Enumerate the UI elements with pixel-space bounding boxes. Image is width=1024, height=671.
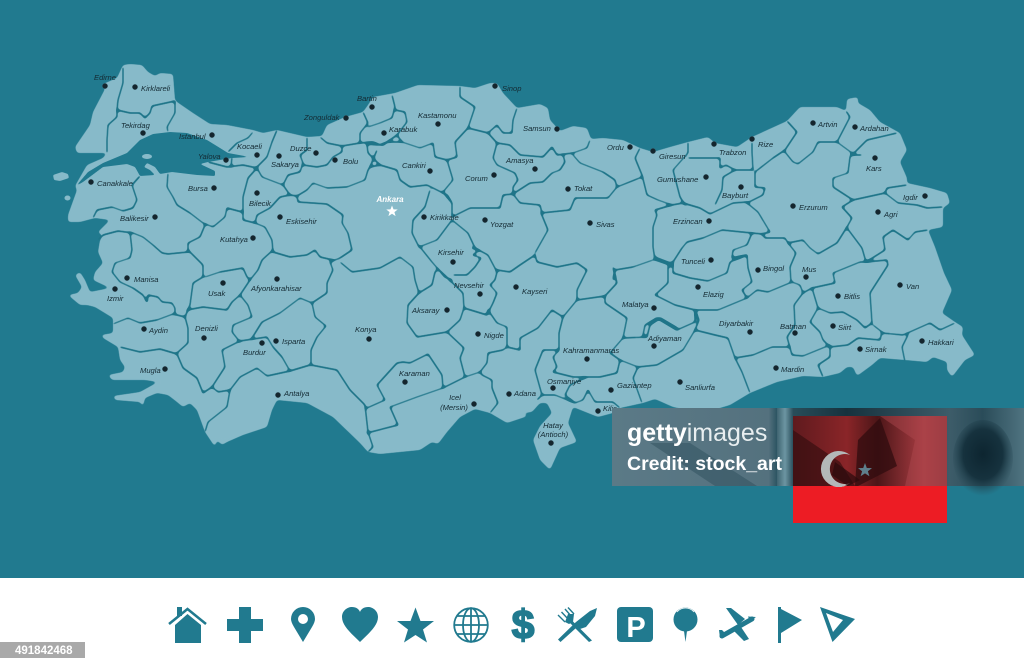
city: Yozgat xyxy=(482,217,514,229)
city: Amasya: Amasya xyxy=(505,156,533,165)
icon: map pin xyxy=(291,607,315,642)
city: Edirne: Edirne xyxy=(94,73,116,82)
city: Tunceli: Tunceli xyxy=(681,257,705,266)
city: Yalova xyxy=(198,152,229,163)
city: Gaziantep: Gaziantep xyxy=(617,381,652,390)
city: Kilis: Kilis xyxy=(603,404,617,413)
star, dimmed xyxy=(858,463,872,476)
city: Usak xyxy=(208,280,227,298)
city: Elazig xyxy=(695,284,724,299)
watermark band: getty images xyxy=(612,408,1024,496)
city: Canakkale: Canakkale xyxy=(97,179,133,188)
city: Kastamonu: Kastamonu xyxy=(418,111,457,120)
city: Balikesir: Balikesir xyxy=(120,214,149,223)
city: Corum xyxy=(465,172,497,183)
city: Konya xyxy=(355,325,377,342)
city: Gaziantep xyxy=(608,381,652,393)
city: Van: Van xyxy=(906,282,919,291)
city: Bartin xyxy=(357,94,377,110)
icon: fork and knife xyxy=(558,608,597,642)
icon: heart xyxy=(342,607,378,642)
city: Erzurum: Erzurum xyxy=(799,203,828,212)
city: Duzce: Duzce xyxy=(290,144,312,153)
city: Sakarya: Sakarya xyxy=(271,160,299,169)
city: Bayburt: Bayburt xyxy=(722,191,749,200)
city: Ardahan: Ardahan xyxy=(859,124,889,133)
city: Kocaeli: Kocaeli xyxy=(237,142,262,151)
city: Trabzon xyxy=(711,141,746,157)
city: Hakkari: Hakkari xyxy=(928,338,954,347)
city: Bingol: Bingol xyxy=(763,264,784,273)
wordmark: gettyimages xyxy=(627,419,767,447)
city: Sivas xyxy=(587,220,615,229)
city: Bilecik xyxy=(249,190,272,208)
city: Icel (Mersin) xyxy=(440,393,477,412)
city: Tekirdag xyxy=(121,121,151,136)
city: Trabzon: Trabzon xyxy=(719,148,746,157)
city: Tekirdag: Tekirdag xyxy=(121,121,151,130)
city: Kilis xyxy=(595,404,617,414)
icon: globe xyxy=(454,608,488,642)
city: Cankiri xyxy=(402,161,433,174)
city: Burdur: Burdur xyxy=(243,348,266,357)
icon: house xyxy=(169,607,206,643)
city: Tokat: Tokat xyxy=(574,184,593,193)
city: Kars xyxy=(866,155,882,173)
footer bar xyxy=(0,578,1024,671)
image id badge: 491842468 xyxy=(15,645,73,657)
city: Bursa: Bursa xyxy=(188,184,208,193)
icon: parking xyxy=(617,607,653,644)
city: Tokat xyxy=(565,184,593,193)
crescent, dimmed xyxy=(821,451,850,487)
city: Bartin: Bartin xyxy=(357,94,377,103)
city: Eskisehir: Eskisehir xyxy=(286,217,317,226)
city: Icel (Mersin): Icel xyxy=(449,393,461,402)
city: Edirne xyxy=(94,73,116,89)
city: Bolu: Bolu xyxy=(343,157,359,166)
city: Usak: Usak xyxy=(208,289,227,298)
city: Afyonkarahisar xyxy=(250,276,302,293)
city: Diyarbakir: Diyarbakir xyxy=(719,319,754,328)
city: Mardin: Mardin xyxy=(781,365,804,374)
credit line: Credit: stock_art xyxy=(627,453,782,475)
city: Hatay (Antioch): (Antioch) xyxy=(538,430,569,439)
city: Batman: Batman xyxy=(780,322,806,331)
icon: golf pin xyxy=(674,608,698,642)
city: Karaman xyxy=(399,369,430,385)
city: Yalova: Yalova xyxy=(198,152,221,161)
city: Samsun: Samsun xyxy=(523,124,551,133)
city: Rize xyxy=(749,136,773,149)
icon: airplane xyxy=(719,608,756,641)
city: Burdur xyxy=(243,340,266,357)
city: Hatay (Antioch) xyxy=(538,421,569,446)
city: Kayseri xyxy=(513,284,548,296)
city: Cankiri: Cankiri xyxy=(402,161,426,170)
city: Artvin: Artvin xyxy=(817,120,837,129)
city: Denizli xyxy=(195,324,218,341)
city: Sanliurfa: Sanliurfa xyxy=(685,383,715,392)
icon: parking: P xyxy=(626,612,646,644)
island: Gokceada xyxy=(53,172,69,181)
city: Kahramanmaras: Kahramanmaras xyxy=(563,346,619,355)
city: Sinop xyxy=(492,83,521,93)
city: Siirt: Siirt xyxy=(838,323,852,332)
city: Amasya xyxy=(505,156,538,172)
city: Izmir xyxy=(107,286,124,303)
city: Kirsehir xyxy=(438,248,464,265)
city: Eskisehir xyxy=(277,214,317,226)
city: Kutahya: Kutahya xyxy=(220,235,248,244)
city: Manisa: Manisa xyxy=(134,275,158,284)
city: Isparta: Isparta xyxy=(282,337,305,346)
icon: flag xyxy=(778,607,802,643)
city: Kocaeli xyxy=(237,142,262,158)
city: Siirt xyxy=(830,323,852,332)
icon: navigation arrow xyxy=(820,607,855,642)
city: Mus xyxy=(802,265,817,280)
map: Turkey provinces xyxy=(53,64,975,470)
city: Zonguldak: Zonguldak xyxy=(303,113,341,122)
icon: cross xyxy=(227,607,263,643)
city: Gumushane: Gumushane xyxy=(657,175,698,184)
crescent xyxy=(821,451,850,487)
city: Nigde xyxy=(475,331,504,340)
city: Kirklareli: Kirklareli xyxy=(141,84,170,93)
city: Adiyaman xyxy=(647,334,682,349)
city: Aydin: Aydin xyxy=(148,326,168,335)
city: Sirnak: Sirnak xyxy=(865,345,888,354)
city: Agri: Agri xyxy=(883,210,898,219)
city: Batman xyxy=(780,322,806,336)
capital: Ankara xyxy=(376,195,404,216)
city: Mugla: Mugla xyxy=(140,366,161,375)
city: Kirikkale: Kirikkale xyxy=(430,213,459,222)
city: Erzincan: Erzincan xyxy=(673,217,703,226)
island: Marmara xyxy=(142,154,152,159)
city: Kars: Kars xyxy=(866,164,882,173)
city: Kastamonu xyxy=(418,111,457,127)
city: Igdir xyxy=(903,193,928,202)
city: Diyarbakir xyxy=(719,319,754,335)
city: Malatya xyxy=(622,300,657,311)
island: Bozcaada xyxy=(64,196,70,200)
city: Sakarya xyxy=(271,153,299,169)
city: Bayburt xyxy=(722,184,749,200)
city: Adana: Adana xyxy=(513,389,536,398)
city: Van xyxy=(897,282,919,291)
city: Mus: Mus xyxy=(802,265,817,274)
image id badge xyxy=(0,642,85,658)
city: Bolu xyxy=(332,157,359,166)
icon: star xyxy=(397,608,434,642)
city: Yozgat: Yozgat xyxy=(490,220,514,229)
icon: dollar: $ xyxy=(512,602,535,648)
city: Aksaray: Aksaray xyxy=(411,306,441,315)
city: Sinop: Sinop xyxy=(502,84,521,93)
city: Osmaniye: Osmaniye xyxy=(547,377,581,386)
Sea of Marmara and Dardanelles xyxy=(76,132,250,186)
city: Konya: Konya xyxy=(355,325,377,334)
city: Bursa xyxy=(188,184,217,193)
city: Sanliurfa xyxy=(677,379,715,392)
city: Nevsehir: Nevsehir xyxy=(454,281,484,290)
city: Rize: Rize xyxy=(758,140,773,149)
city: Icel (Mersin): (Mersin) xyxy=(440,403,468,412)
city: Malatya: Malatya xyxy=(622,300,649,309)
city: Denizli: Denizli xyxy=(195,324,218,333)
city: Izmir: Izmir xyxy=(107,294,124,303)
flag of Turkey xyxy=(793,416,947,523)
city: Kahramanmaras xyxy=(563,346,619,362)
city: Giresun xyxy=(650,148,686,161)
city: Istanbul: Istanbul xyxy=(179,132,206,141)
city: Osmaniye xyxy=(547,377,581,391)
city: Duzce xyxy=(290,144,319,156)
city: Sivas: Sivas xyxy=(596,220,615,229)
city: Elazig: Elazig xyxy=(703,290,724,299)
city: Karabuk: Karabuk xyxy=(389,125,418,134)
city: Adiyaman: Adiyaman xyxy=(647,334,682,343)
city: Agri xyxy=(875,209,898,219)
city: Giresun: Giresun xyxy=(659,152,686,161)
city: Hatay (Antioch): Hatay xyxy=(543,421,564,430)
city: Bilecik: Bilecik xyxy=(249,199,272,208)
city: Afyonkarahisar: Afyonkarahisar xyxy=(250,284,302,293)
city: Corum: Corum xyxy=(465,174,488,183)
province borders xyxy=(93,67,955,452)
city: Kirsehir: Kirsehir xyxy=(438,248,464,257)
city: Bitlis xyxy=(835,292,860,301)
capital: Ankara: Ankara xyxy=(376,195,404,204)
city: Igdir: Igdir xyxy=(903,193,918,202)
city: Ordu xyxy=(607,143,633,152)
city: Bitlis: Bitlis xyxy=(844,292,860,301)
city: Kayseri: Kayseri xyxy=(522,287,548,296)
city: Nevsehir xyxy=(454,281,484,297)
land mass xyxy=(68,64,975,470)
city: Ordu: Ordu xyxy=(607,143,625,152)
city: Karabuk xyxy=(381,125,418,136)
city: Karaman: Karaman xyxy=(399,369,430,378)
city: Nigde: Nigde xyxy=(484,331,504,340)
city: Antalya: Antalya xyxy=(283,389,309,398)
